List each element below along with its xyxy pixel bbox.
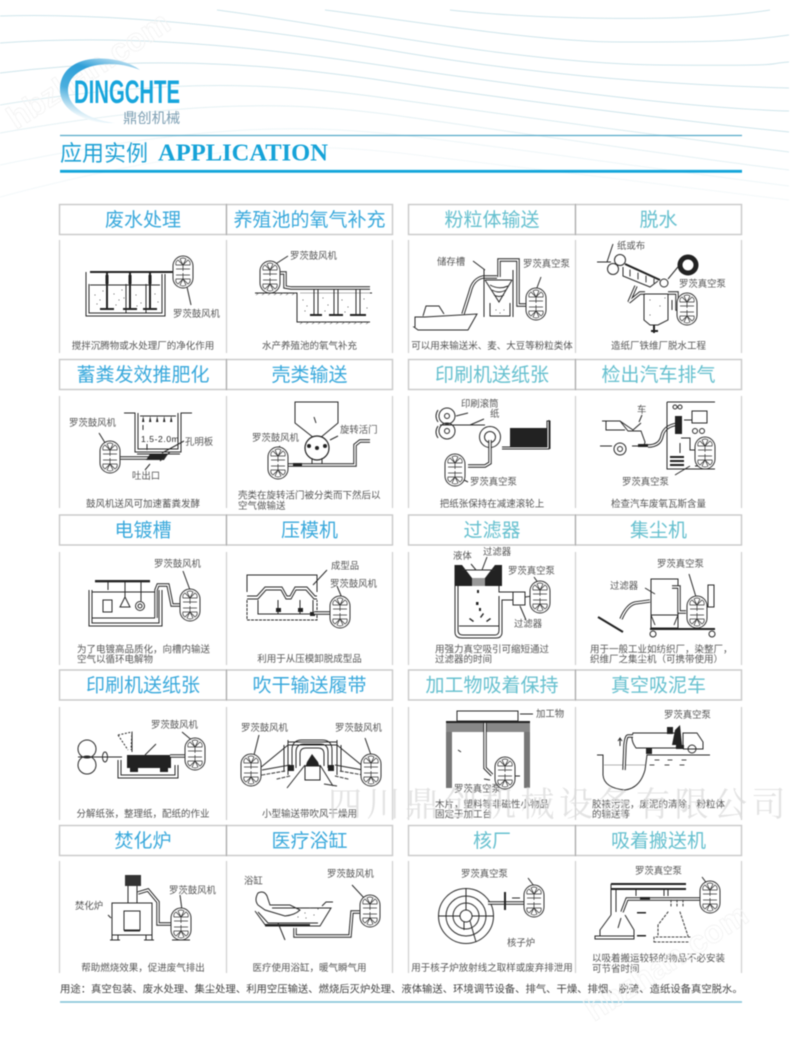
- caption: 用于一般工业如纺织厂，染整厂，: [590, 644, 733, 656]
- heading: 真空吸泥车: [611, 674, 706, 696]
- heading text Chinese: 应用实例: [60, 141, 148, 166]
- heading: [226, 204, 392, 235]
- heading: [408, 826, 576, 856]
- logo wordmark: DINGCHTE: [74, 74, 180, 110]
- heading: 壳类输送: [271, 364, 348, 386]
- panel: 吸着搬送机: [576, 825, 742, 975]
- panel: 印刷机送纸张: [408, 360, 576, 510]
- panel: 电镀槽: [60, 515, 226, 666]
- logo Chinese name: 鼎创机械: [123, 110, 180, 127]
- panel: 真空吸泥车: [576, 670, 742, 820]
- panel: 核厂: [408, 826, 576, 974]
- heading: [408, 360, 576, 390]
- diagram: [438, 868, 544, 948]
- icon: vacuum pump: [530, 581, 550, 613]
- heading: 印刷机送纸张: [86, 674, 200, 696]
- heading: 养殖池的氧气补充: [233, 209, 386, 231]
- panel: 脱水: [576, 204, 742, 353]
- panel: 蓄粪发效推肥化: [60, 360, 226, 510]
- label: 罗茨真空泵: [508, 565, 555, 576]
- label: 罗茨真空泵: [664, 709, 711, 720]
- panel: 印刷机送纸张 2: [60, 670, 226, 820]
- diagram: [78, 719, 205, 778]
- heading: 吸着搬送机: [611, 830, 706, 852]
- caption line 2: 过滤器的时间: [435, 654, 492, 666]
- panel: 压模机: [226, 514, 392, 665]
- label: 加工物: [536, 708, 564, 719]
- label: 过滤器: [514, 618, 543, 629]
- caption: 鼓风机送风可加速蓄粪发酵: [86, 498, 200, 510]
- label: 纸或布: [617, 240, 645, 251]
- caption: 水产养殖池的氧气补充: [262, 340, 357, 352]
- icon: blower: [268, 447, 288, 479]
- icon: blower: [171, 908, 191, 940]
- icon: vacuum pump: [677, 293, 697, 325]
- heading: [408, 670, 576, 700]
- heading text English: APPLICATION: [158, 140, 329, 166]
- caption: 为了电镀高品质化，向槽内输送: [77, 644, 211, 656]
- panel: 检出汽车排气: [576, 359, 742, 510]
- label: 吐出口: [132, 470, 160, 481]
- heading: [226, 825, 392, 856]
- label: 罗茨鼓风机: [154, 558, 202, 569]
- diagram: [597, 240, 726, 333]
- caption: 检查汽车废氧瓦斯含量: [611, 498, 706, 510]
- label: 罗茨真空泵: [523, 258, 570, 269]
- logo crescent: [60, 59, 140, 123]
- label: 罗茨真空泵: [657, 558, 704, 569]
- panel: 焚化炉: [60, 826, 226, 974]
- panel: 加工物吸着保持: [408, 670, 576, 820]
- heading: [576, 204, 742, 235]
- heading: [226, 670, 392, 700]
- label: 过滤器: [610, 580, 639, 591]
- caption line 2: 固定于加工台: [435, 808, 492, 820]
- label: 罗茨真空泵: [470, 476, 517, 487]
- heading: [408, 515, 576, 545]
- icon: blower: [330, 596, 350, 628]
- label: 罗茨真空泵: [461, 868, 508, 879]
- diagram: [247, 560, 378, 628]
- icon: vacuum pump: [495, 757, 515, 789]
- diagram: [86, 256, 221, 319]
- label: 罗茨鼓风机: [173, 308, 221, 319]
- icon: blower: [260, 261, 280, 293]
- caption: 医疗使用浴缸，暖气瞬气用: [252, 962, 367, 974]
- heading: 集尘机: [630, 520, 687, 542]
- icon: blower: [100, 441, 120, 473]
- heading: 印刷机送纸张: [435, 364, 549, 386]
- heading: [408, 204, 576, 234]
- diagram: [255, 250, 372, 324]
- label: 印刷滚筒: [461, 398, 499, 409]
- label: 储存槽: [437, 256, 465, 267]
- diagram: [446, 708, 564, 794]
- caption line 2: 空气做输送: [238, 500, 286, 512]
- caption: 胶裱污泥，废泥的清除，粉粒体: [592, 798, 726, 810]
- label: 浴缸: [244, 875, 263, 886]
- caption: 分解纸张，整理纸，配纸的作业: [76, 808, 210, 820]
- caption: 利用于从压模卸脱成型品: [257, 653, 362, 665]
- icon: vacuum pump: [526, 288, 546, 320]
- watermark: company name: 四川鼎创机械设备有限公司: [328, 786, 790, 824]
- label: 罗茨鼓风机: [169, 884, 217, 896]
- heading: 焚化炉: [114, 830, 172, 852]
- label: 焚化炉: [75, 900, 103, 911]
- watermark: hbzhan.com bottom right: hbzhan.com: [578, 896, 754, 1028]
- caption: 小型输送带吹风干燥用: [262, 808, 357, 820]
- caption: 用强力真空吸引可缩短通过: [435, 644, 550, 656]
- caption: 木片，塑料等非磁性小物品: [435, 798, 549, 810]
- heading: [226, 514, 392, 546]
- icon: blower right: [361, 754, 381, 786]
- heading: 过滤器: [463, 520, 521, 542]
- panel: 集尘机: [576, 514, 742, 666]
- heading: [226, 359, 392, 390]
- label: 罗茨鼓风机: [151, 719, 199, 730]
- caption: 用于核子炉放射线之取样或废弃排泄用: [411, 962, 573, 974]
- diagram: [598, 558, 715, 637]
- heading: [576, 514, 742, 546]
- icon: blower: [360, 895, 380, 927]
- background swoosh lines: [0, 10, 789, 200]
- diagram: [252, 402, 378, 479]
- caption: 搅拌沉腾物或水处理厂的净化作用: [72, 340, 214, 352]
- icon: vacuum pump: [524, 885, 544, 917]
- label: 液体: [453, 550, 472, 561]
- icon: blower: [185, 738, 205, 770]
- panel: 废水处理: [60, 204, 226, 353]
- heading: [576, 825, 742, 856]
- heading: [576, 670, 742, 700]
- heading: 蓄粪发效推肥化: [76, 364, 210, 386]
- icon: blower: [180, 589, 200, 621]
- heading: 电镀槽: [114, 520, 172, 542]
- diagram: [453, 546, 555, 638]
- logo: DINGCHTE: [60, 59, 180, 127]
- label: 罗茨鼓风机: [290, 250, 338, 261]
- panel: 养殖池的氧气补充: [226, 204, 392, 353]
- heading: 压模机: [281, 520, 338, 542]
- label: 纸: [490, 408, 500, 419]
- diagram: [69, 413, 214, 481]
- icon: vacuum pump: [687, 596, 707, 628]
- caption: 把纸张保持在减速滚轮上: [440, 498, 545, 510]
- caption: 可以用来输送米、麦、大豆等粉粒类体: [411, 340, 573, 352]
- diagram: [244, 868, 380, 940]
- section heading: [60, 136, 742, 171]
- label: 核子炉: [507, 937, 535, 948]
- watermark: hbzhan.com top left: hbzhan.com: [0, 4, 176, 136]
- caption: 以吸着搬运较轻的物品不必安装: [592, 952, 726, 964]
- heading: [60, 204, 226, 234]
- panel: 吹干输送履带: [226, 670, 392, 820]
- heading: 检出汽车排气: [601, 364, 716, 386]
- heading: 吹干输送履带: [252, 674, 367, 696]
- label: 罗茨鼓风机: [252, 432, 300, 443]
- diagram: [414, 256, 570, 330]
- label: 罗茨真空泵: [635, 865, 682, 876]
- icon: vacuum pump: [445, 454, 465, 486]
- panel: 粉粒体输送: [408, 204, 576, 353]
- label: 罗茨鼓风机: [241, 722, 289, 733]
- heading: [576, 359, 742, 390]
- label: 罗茨鼓风机: [69, 417, 117, 428]
- caption line 2: 的输送等: [592, 808, 631, 820]
- label: 成型品: [331, 560, 359, 571]
- label: 旋转活门: [340, 424, 378, 435]
- label: 过滤器: [483, 546, 512, 557]
- label: 罗茨鼓风机: [327, 868, 375, 879]
- icon: vacuum pump: [695, 437, 715, 469]
- diagram: [600, 402, 715, 487]
- panel: 壳类输送: [226, 359, 392, 512]
- heading: 废水处理: [105, 209, 181, 231]
- icon: vacuum pump: [700, 881, 720, 913]
- diagram: [436, 398, 550, 487]
- label: 车: [637, 404, 646, 415]
- label: 罗茨鼓风机: [330, 578, 378, 589]
- caption: 壳类在旋转活门被分类而下然后以: [238, 490, 381, 502]
- diagram: [89, 558, 202, 626]
- label: 罗茨真空泵: [679, 278, 726, 289]
- heading: 脱水: [639, 209, 678, 231]
- caption line 2: 可节省时间: [592, 963, 640, 975]
- diagram: [241, 722, 383, 788]
- caption: 帮助燃烧效果，促进废气排出: [81, 962, 205, 974]
- label: 孔明板: [185, 436, 214, 447]
- label: 罗茨真空泵: [454, 783, 501, 794]
- heading: [60, 670, 226, 700]
- diagram: 1.5-2.0m: [141, 434, 179, 444]
- caption line 2: 织维厂之集尘机（可携带使用）: [590, 654, 723, 666]
- heading: 加工物吸着保持: [425, 674, 559, 696]
- icon: blower: [173, 256, 193, 288]
- panel: 医疗浴缸: [226, 825, 392, 974]
- icon: blower left: [241, 754, 261, 786]
- caption: 造纸厂铁维厂脱水工程: [611, 340, 706, 352]
- heading: [60, 360, 226, 390]
- caption line 2: 空气以循环电解物: [77, 654, 154, 666]
- diagram: [597, 709, 711, 790]
- footer usage text: 用途：真空包装、废水处理、集尘处理、利用空压输送、燃烧后灭炉处理、液体输送、环境调节设备、排气、干燥、排烟、脱硫、造纸设备真空脱水。: [60, 982, 743, 996]
- heading: [60, 826, 226, 856]
- heading: [60, 515, 226, 545]
- label: 罗茨鼓风机: [335, 722, 383, 733]
- diagram: [595, 865, 720, 942]
- label: 罗茨真空泵: [622, 476, 669, 487]
- heading: 粉粒体输送: [444, 209, 540, 231]
- diagram: [75, 875, 217, 940]
- heading: 医疗浴缸: [271, 830, 348, 852]
- heading: 核厂: [473, 830, 511, 852]
- panel: 过滤器: [408, 515, 576, 666]
